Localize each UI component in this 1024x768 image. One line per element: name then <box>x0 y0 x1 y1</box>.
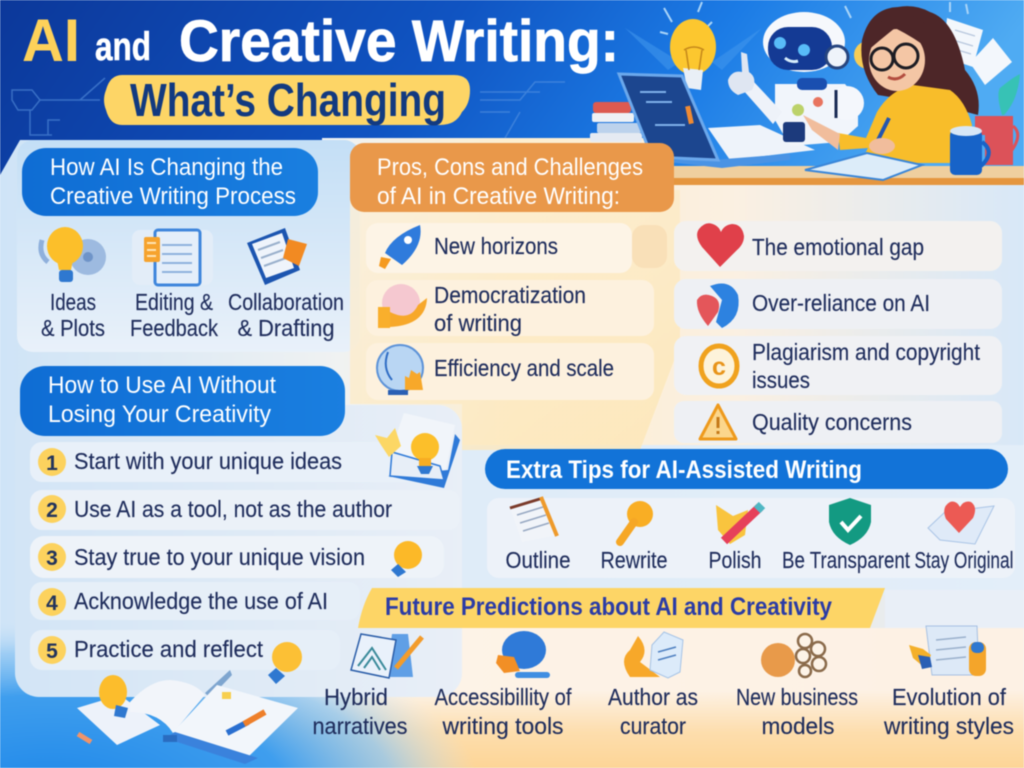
step 4: Acknowledge the use of AI <box>74 588 328 614</box>
heading: Pros, Cons and Challenges <box>377 154 643 181</box>
prediction: new business models <box>736 634 858 739</box>
labels: & Plots <box>41 315 105 341</box>
pro: efficiency and scale: Efficiency and scale <box>434 355 614 381</box>
tip: be transparent <box>782 498 910 573</box>
tip: rewrite <box>600 501 668 573</box>
labels: Collaboration <box>228 289 344 315</box>
con: quality concerns <box>674 401 1002 443</box>
step 3 <box>30 536 444 578</box>
panel: cons list <box>674 221 1002 443</box>
step 5 <box>30 630 340 670</box>
panel: extra tips for AI-assisted writing <box>485 449 1015 578</box>
pro: democratization of writing: of writing <box>434 310 522 336</box>
pro: new horizons: New horizons <box>434 233 558 259</box>
prediction: evolution of writing styles: Evolution of <box>892 684 1007 710</box>
subtitle banner: What’s Changing <box>130 74 446 126</box>
heading: Creative Writing Process <box>50 183 296 210</box>
labels: Feedback <box>130 315 218 341</box>
title <box>22 7 619 74</box>
icon: ideas bulb and gear <box>41 227 106 282</box>
con: plagiarism and copyright: c <box>712 353 726 381</box>
heading <box>358 588 885 628</box>
pro: democratization of writing: Democratization <box>434 282 586 308</box>
prediction: accessibility of writing tools <box>434 631 572 739</box>
heading <box>20 366 345 436</box>
icon: books <box>590 102 642 142</box>
con: over-reliance on AI: Over-reliance on AI <box>752 290 930 316</box>
tip: polish: Polish <box>708 547 762 573</box>
step 5: 5 <box>46 640 58 663</box>
tip: rewrite: Rewrite <box>600 547 668 573</box>
con: plagiarism and copyright <box>674 336 1002 395</box>
heading: Extra Tips for AI-Assisted Writing <box>506 456 862 484</box>
step 2: 2 <box>46 499 58 522</box>
prediction: hybrid narratives: Hybrid <box>324 684 388 710</box>
heading: Future Predictions about AI and Creativity <box>385 593 832 621</box>
labels: Editing & <box>135 289 213 315</box>
prediction: hybrid narratives: narratives <box>312 713 408 739</box>
icon: woman writing <box>803 6 979 163</box>
prediction: evolution of writing styles: writing styles <box>883 713 1014 739</box>
prediction: accessibility of writing tools: writing tools <box>442 713 564 739</box>
prediction: author as curator <box>608 632 698 739</box>
prediction: new business models: models <box>762 713 834 739</box>
step 1 <box>30 442 430 482</box>
icon: mug and plant pot <box>950 74 1020 175</box>
labels: & Drafting <box>238 315 334 341</box>
heading: How AI Is Changing the <box>50 154 283 181</box>
step 1: Start with your unique ideas <box>74 448 342 474</box>
heading: of AI in Creative Writing: <box>377 183 620 210</box>
con: plagiarism and copyright: issues <box>752 367 810 393</box>
icon: faded hand <box>632 225 667 268</box>
con: over-reliance on AI <box>674 279 1002 329</box>
tip: be transparent: Be Transparent <box>782 547 910 573</box>
icon: paper stack with bulb <box>375 413 460 488</box>
icon: notebook <box>805 153 922 180</box>
panel: future predictions <box>312 588 1014 739</box>
illustration: desk scene <box>590 2 1024 185</box>
heading: How to Use AI Without <box>48 372 276 399</box>
title: and <box>95 25 151 69</box>
con: quality concerns: Quality concerns <box>752 409 912 435</box>
prediction: author as curator: Author as <box>608 684 698 710</box>
step 1: 1 <box>46 452 58 475</box>
icon: open book with bulb and pen <box>77 670 298 764</box>
icon: desk <box>674 166 1024 178</box>
prediction: evolution of writing styles <box>883 626 1014 739</box>
icon: light bulb <box>670 19 716 90</box>
tip: outline <box>506 497 570 573</box>
prediction: author as curator: curator <box>620 713 686 739</box>
icon: light rays <box>625 28 762 70</box>
heading <box>350 143 674 212</box>
panel: pros, cons and challenges <box>350 143 680 450</box>
heading: Losing Your Creativity <box>48 401 271 428</box>
heading <box>485 449 1008 489</box>
icon: bulb row 5 <box>268 642 302 684</box>
step 3: Stay true to your unique vision <box>74 544 365 570</box>
icon: editing document <box>132 230 213 285</box>
con: the emotional gap: The emotional gap <box>752 234 924 260</box>
prediction: hybrid narratives <box>312 634 422 739</box>
step 2 <box>30 490 460 530</box>
con: plagiarism and copyright: Plagiarism and copyright <box>752 339 981 365</box>
prediction: new business models: New business <box>736 684 858 710</box>
panel: how to use AI without losing your creativity <box>15 366 462 697</box>
labels: Ideas <box>50 289 96 315</box>
title: Creative Writing: <box>179 9 619 74</box>
step 5: Practice and reflect <box>74 636 264 662</box>
icon: robot <box>728 12 864 146</box>
heading <box>22 148 318 216</box>
circuit decoration <box>12 78 565 138</box>
pro: efficiency and scale <box>366 343 654 400</box>
step 2: Use AI as a tool, not as the author <box>74 496 392 522</box>
title: AI <box>22 7 80 74</box>
step 4 <box>30 582 360 620</box>
tip: polish <box>708 505 762 573</box>
con: the emotional gap <box>674 221 1002 271</box>
icon: laptop <box>619 74 815 168</box>
prediction: accessibility of writing tools: Accessibillity of <box>434 684 572 710</box>
tip: stay original <box>914 502 1014 573</box>
icon: collaboration notebook <box>247 228 307 285</box>
pro: new horizons <box>366 223 632 273</box>
tip: outline: Outline <box>506 547 570 573</box>
step 4: 4 <box>46 592 58 615</box>
panel: how AI is changing the creative writing process <box>17 140 360 352</box>
icon: paper sheets <box>924 18 1012 85</box>
labels <box>41 289 344 341</box>
pro: democratization of writing <box>366 280 654 336</box>
icon: bulb row 3 <box>391 541 422 577</box>
step 3: 3 <box>46 547 58 570</box>
